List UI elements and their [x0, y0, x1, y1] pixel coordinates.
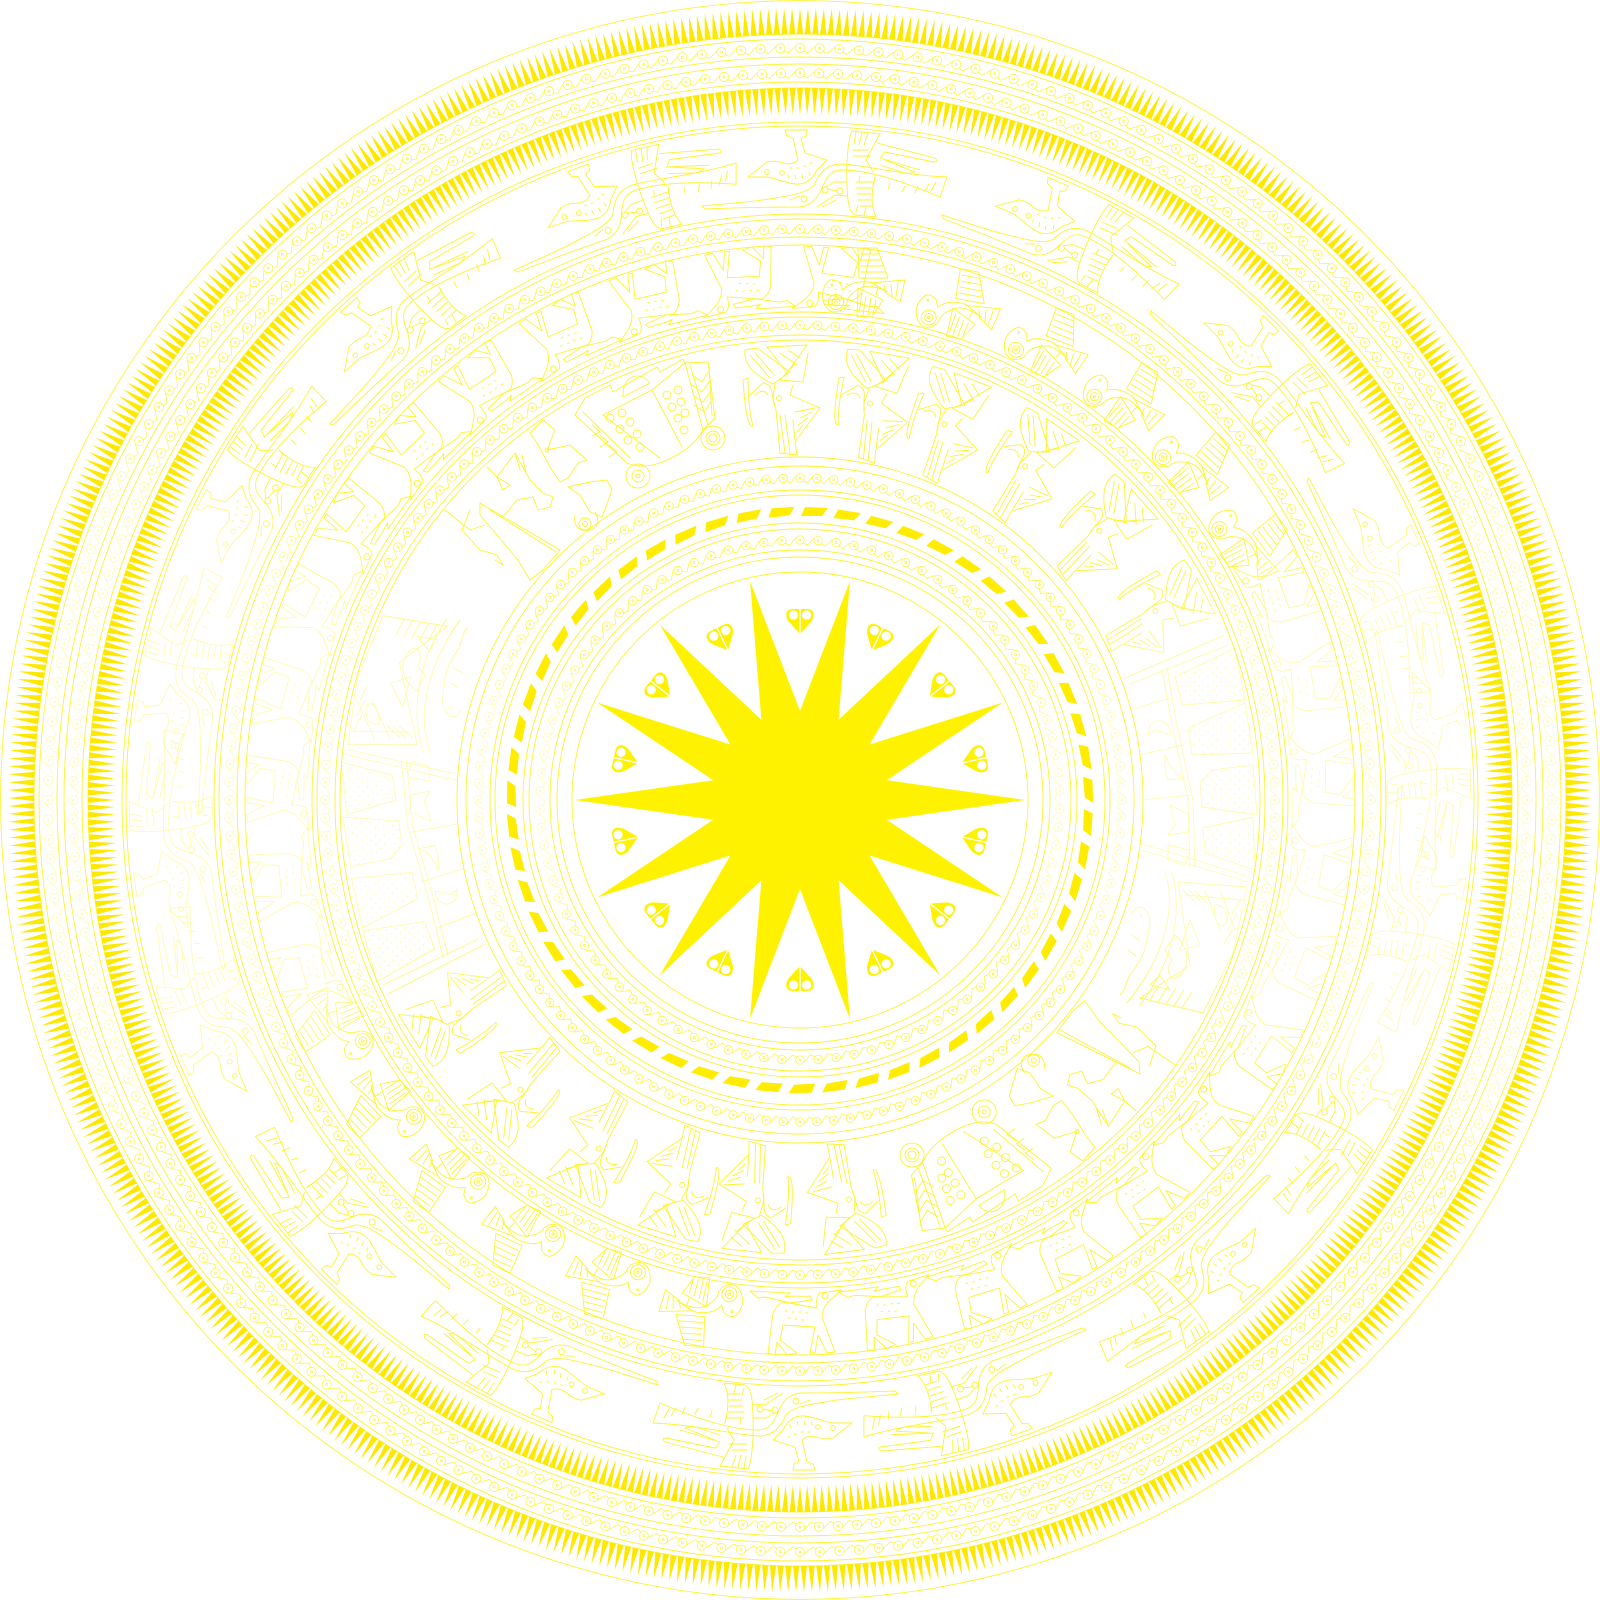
middle scene: deer and birds: [206, 208, 1357, 1355]
outer scene: flying herons and standing birds: [117, 119, 1483, 1481]
central fourteen-point star: [575, 581, 1025, 1019]
spiral band between middle and inner scenes: [320, 320, 1280, 1280]
dashed ring: [403, 445, 1165, 1201]
spiral band around dashed ring, inner: [536, 536, 1064, 1064]
spiral band between outer and middle scenes: [224, 224, 1376, 1376]
spiral band around dashed ring, outer: [474, 474, 1126, 1126]
heart motifs between star points: [610, 608, 990, 992]
inner scene: feathered dancers, boats, warriors and houses: [329, 344, 1257, 1287]
